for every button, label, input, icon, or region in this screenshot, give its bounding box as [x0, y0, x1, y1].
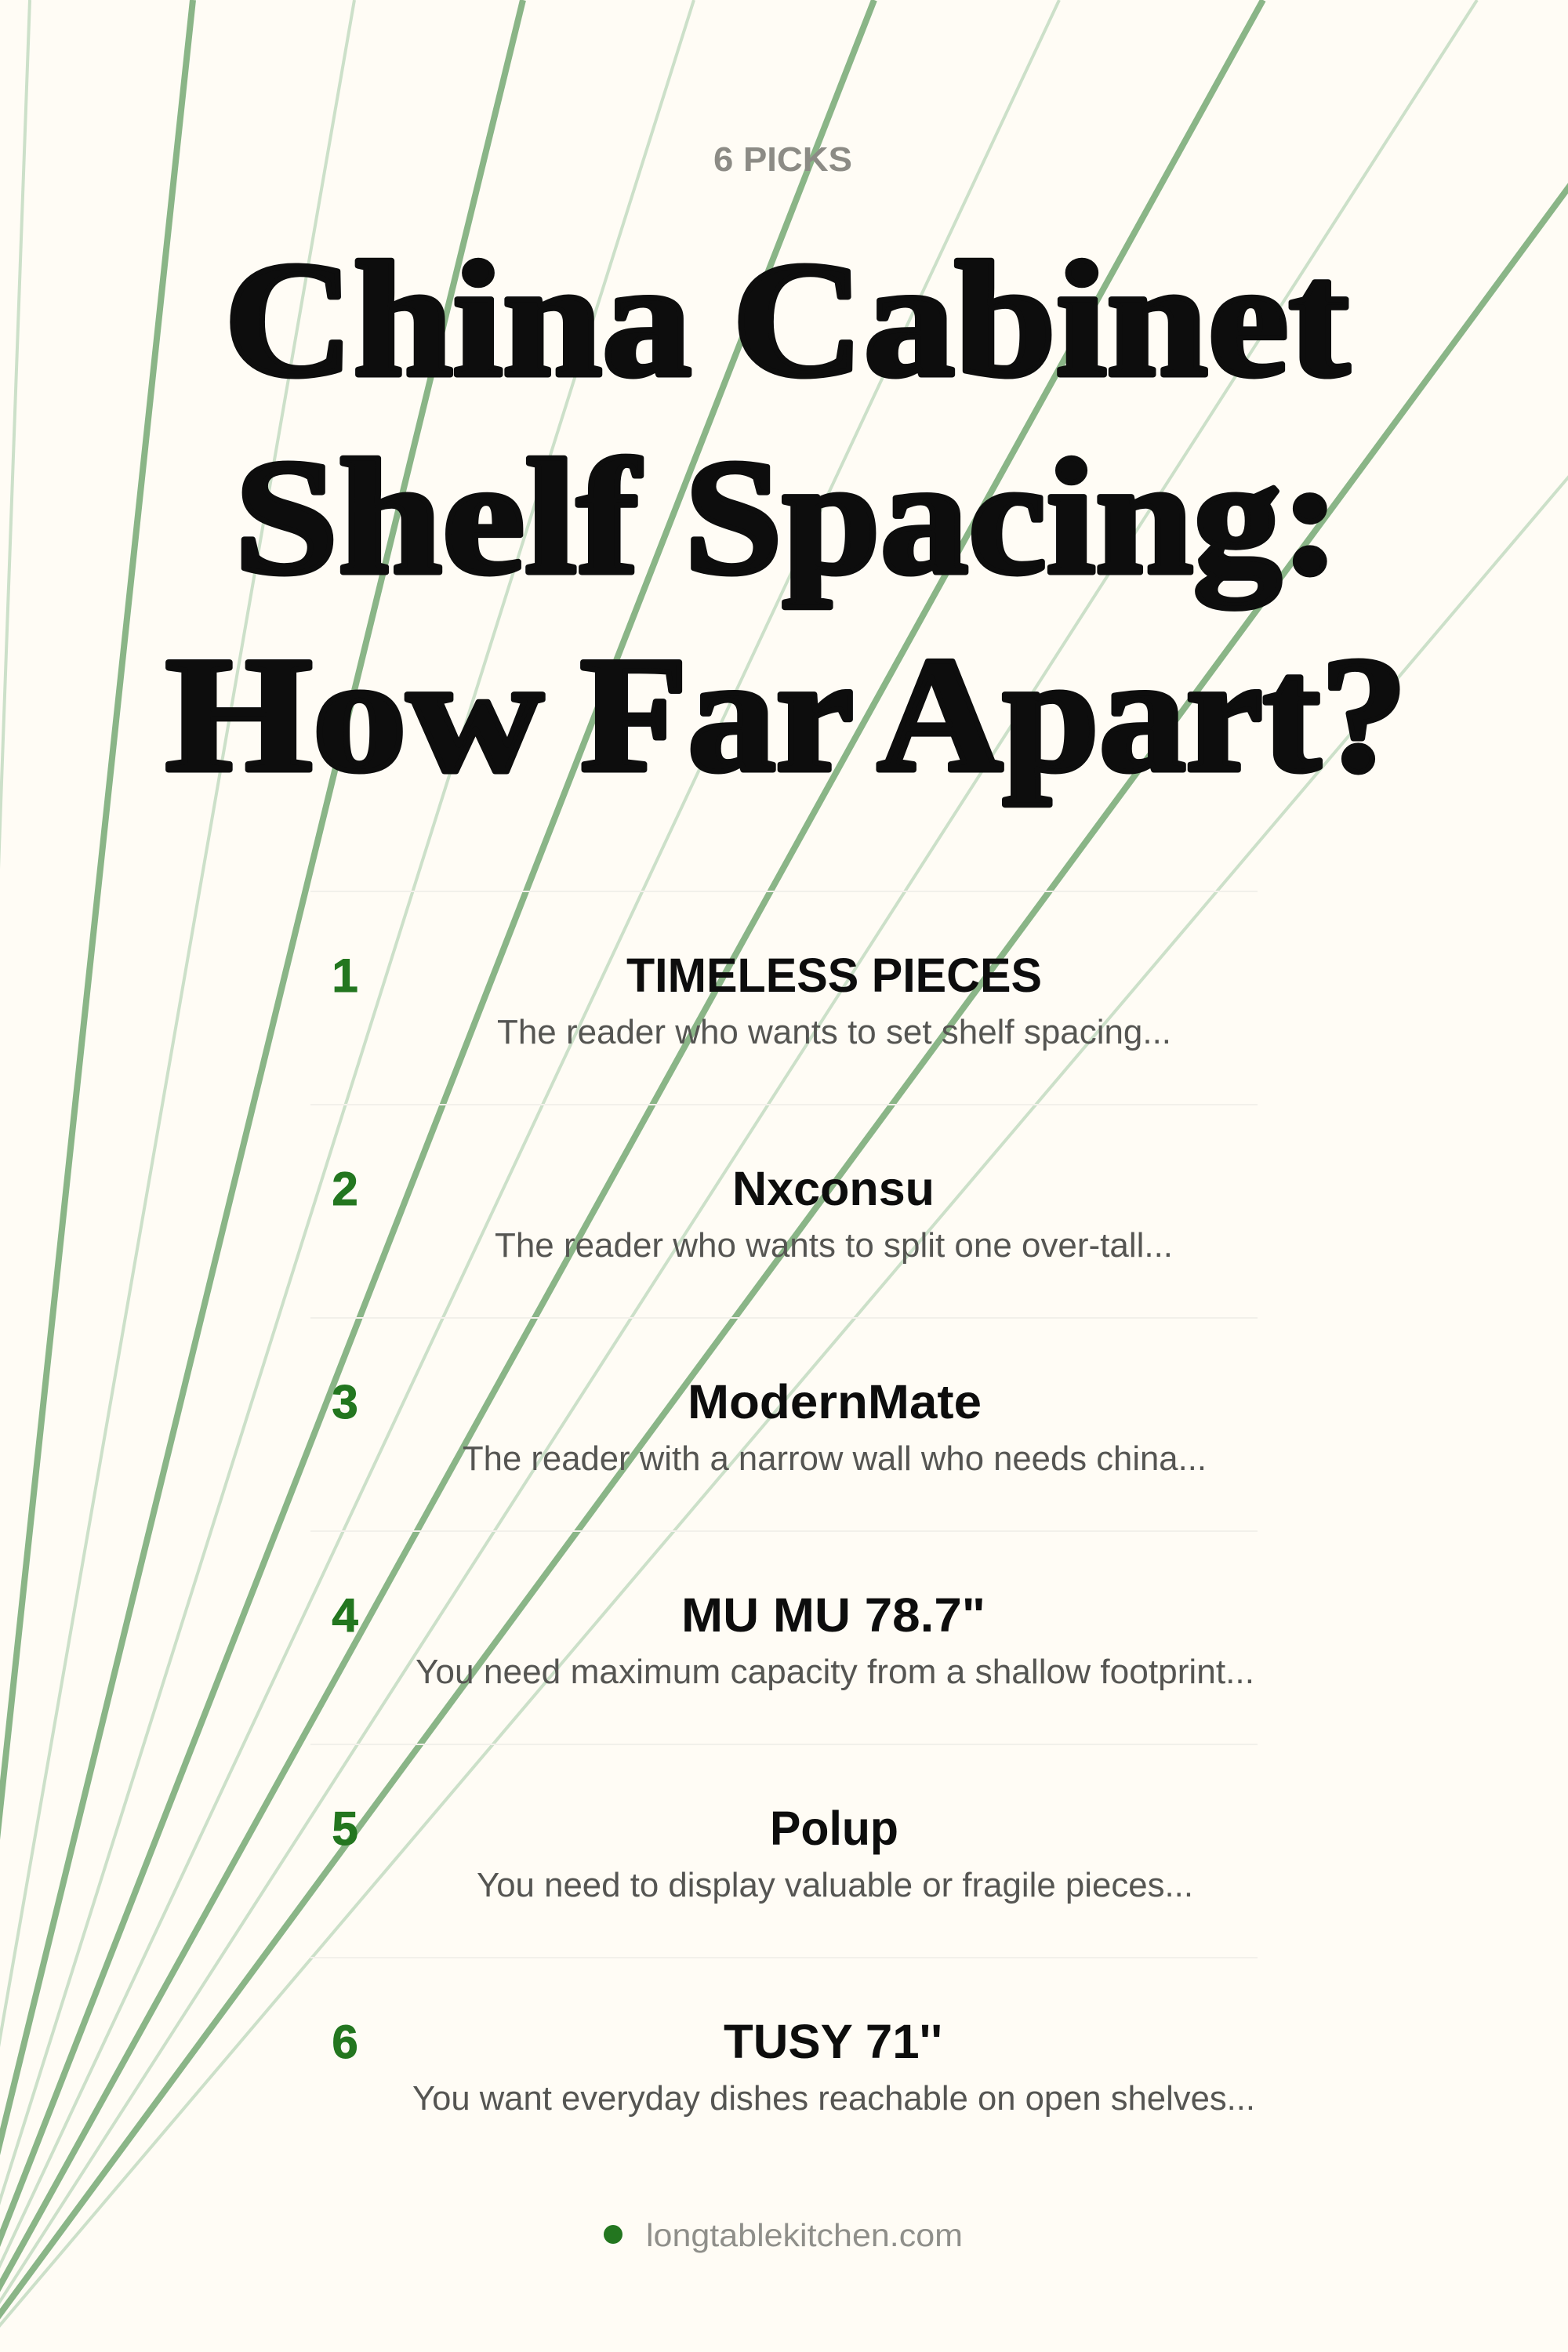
eyebrow: 6 picks: 6 PICKS	[713, 140, 852, 179]
pick list	[310, 891, 1258, 2118]
pick 4	[310, 1531, 1258, 1691]
pick 5: Polup	[770, 1802, 898, 1855]
title: Shelf	[234, 426, 641, 608]
title: Far	[580, 624, 854, 806]
pick 1: 1	[332, 949, 358, 1002]
pick 5: 5	[332, 1802, 358, 1855]
pick 4: MU MU 78.7"	[681, 1588, 985, 1642]
title: China	[224, 229, 691, 411]
title	[165, 229, 1407, 806]
footer: site credit: longtablekitchen.com	[646, 2217, 963, 2253]
pick 3: 3	[332, 1376, 358, 1428]
pick 6	[310, 1958, 1258, 2118]
pick 1: TIMELESS PIECES	[626, 949, 1042, 1002]
pick 2: 2	[332, 1163, 358, 1215]
pick 2: The reader who wants to split one over-tall...	[495, 1226, 1173, 1265]
pick 6: TUSY 71''	[724, 2015, 942, 2068]
pick 6: You want everyday dishes reachable on open shelves...	[412, 2079, 1255, 2118]
pick 2	[310, 1105, 1258, 1265]
pick 3: ModernMate	[688, 1375, 982, 1428]
pick 1: The reader who wants to set shelf spacing...	[497, 1013, 1171, 1051]
pick 5: You need to display valuable or fragile pieces...	[477, 1866, 1193, 1904]
title: Cabinet	[732, 229, 1349, 411]
pick 4: You need maximum capacity from a shallow footprint...	[416, 1653, 1254, 1691]
pick 3	[310, 1318, 1258, 1478]
title: Spacing:	[684, 426, 1340, 608]
pick 3: The reader with a narrow wall who needs china...	[463, 1439, 1207, 1478]
pick 5	[310, 1744, 1258, 1904]
pick 1	[310, 891, 1258, 1051]
pick 4: 4	[332, 1589, 358, 1642]
pick 2: Nxconsu	[732, 1162, 935, 1215]
title: How	[165, 624, 543, 806]
title: Apart?	[877, 624, 1407, 806]
pick 6: 6	[332, 2016, 358, 2068]
